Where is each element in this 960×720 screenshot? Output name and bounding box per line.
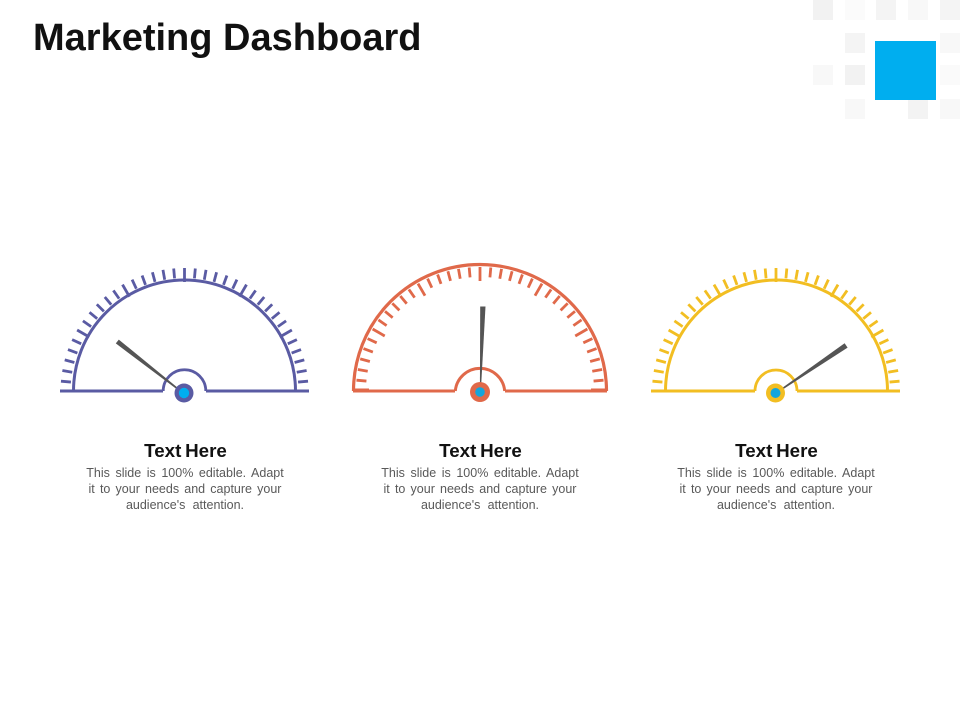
caption 1	[86, 440, 284, 512]
gauge 1: purple	[60, 268, 309, 402]
caption 1: This slide is 100% editable. Adapt	[86, 466, 284, 480]
gauge 3: yellow	[651, 268, 900, 402]
caption 1: it to your needs and capture your	[89, 482, 281, 496]
needle 3	[776, 343, 848, 394]
caption 2: Text Here	[439, 440, 522, 461]
hub 2	[470, 382, 490, 402]
title: Marketing Dashboard	[33, 17, 422, 59]
needle 1	[116, 340, 184, 394]
needle 2	[480, 306, 486, 392]
gauge 2: orange	[353, 265, 607, 402]
caption 3: audience's attention.	[717, 498, 835, 512]
caption 2: it to your needs and capture your	[384, 482, 576, 496]
caption 2: This slide is 100% editable. Adapt	[381, 466, 579, 480]
caption 3: This slide is 100% editable. Adapt	[677, 466, 875, 480]
caption 3: it to your needs and capture your	[680, 482, 872, 496]
hub 1	[174, 384, 194, 402]
decorative square pattern	[813, 0, 960, 119]
caption 3	[677, 440, 875, 512]
caption 1: Text Here	[144, 440, 227, 461]
caption 2	[381, 440, 579, 512]
caption 1: audience's attention.	[126, 498, 244, 512]
caption 2: audience's attention.	[421, 498, 539, 512]
icon: blue square	[875, 41, 936, 100]
caption 3: Text Here	[735, 440, 818, 461]
hub 3	[766, 384, 785, 402]
